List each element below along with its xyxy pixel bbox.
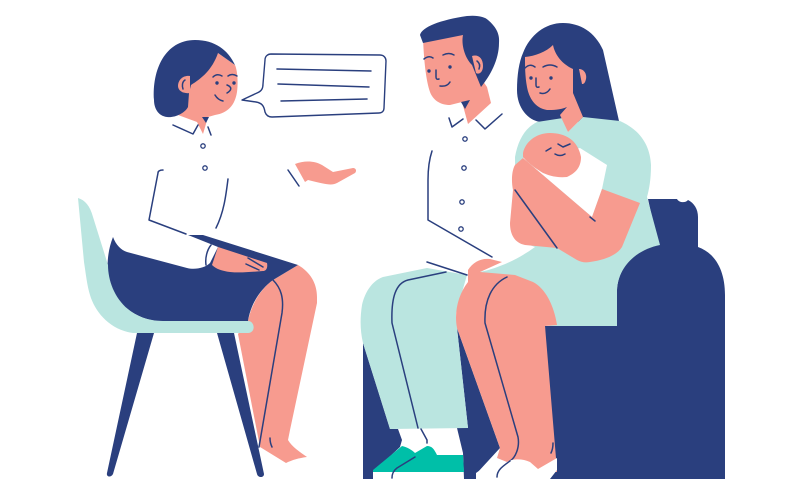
- mother hair: [517, 23, 619, 122]
- father face and neck: [423, 28, 491, 124]
- doctor sleeve: [113, 215, 218, 269]
- doctor face details: [182, 74, 237, 123]
- mother ear: [579, 69, 586, 84]
- father buttons: [459, 137, 467, 231]
- sofa: [363, 199, 725, 479]
- doctor buttons: [201, 144, 207, 170]
- mother shoes: [476, 458, 557, 479]
- mother face and neck: [525, 45, 583, 132]
- doctor extended hand: [288, 161, 356, 186]
- father face details: [424, 54, 480, 109]
- figure: doctor on chair: [78, 40, 356, 477]
- figure: mother with baby: [456, 23, 660, 479]
- baby head: [523, 133, 581, 177]
- baby blanket: [523, 148, 607, 217]
- mother face details: [525, 65, 557, 94]
- father shoes: [373, 446, 464, 478]
- doctor hand on lap: [212, 247, 267, 272]
- mother arm: [510, 158, 640, 262]
- father trousers: [361, 268, 468, 429]
- mother shoe seam: [497, 461, 510, 477]
- doctor leg: [238, 265, 317, 463]
- doctor hair: [154, 40, 235, 117]
- speech bubble: [242, 54, 386, 117]
- doctor face: [178, 53, 238, 134]
- baby face: [546, 144, 570, 156]
- doctor ear: [178, 76, 190, 93]
- father hair: [420, 16, 499, 87]
- father shirt lines: [427, 151, 492, 275]
- chair seat and back: [78, 198, 254, 333]
- father trouser seam: [392, 272, 446, 443]
- chair back leg: [217, 333, 264, 477]
- mother leg seam: [485, 277, 553, 477]
- mother leg: [456, 259, 557, 472]
- father ear: [472, 55, 483, 74]
- doctor skirt: [108, 235, 298, 321]
- doctor collar: [173, 125, 211, 135]
- chair front leg: [107, 333, 154, 477]
- mother arm lines: [515, 190, 595, 248]
- father collar: [449, 114, 502, 129]
- doctor shirt lines: [149, 170, 228, 265]
- figure: father: [361, 16, 502, 478]
- mother dress: [480, 117, 660, 326]
